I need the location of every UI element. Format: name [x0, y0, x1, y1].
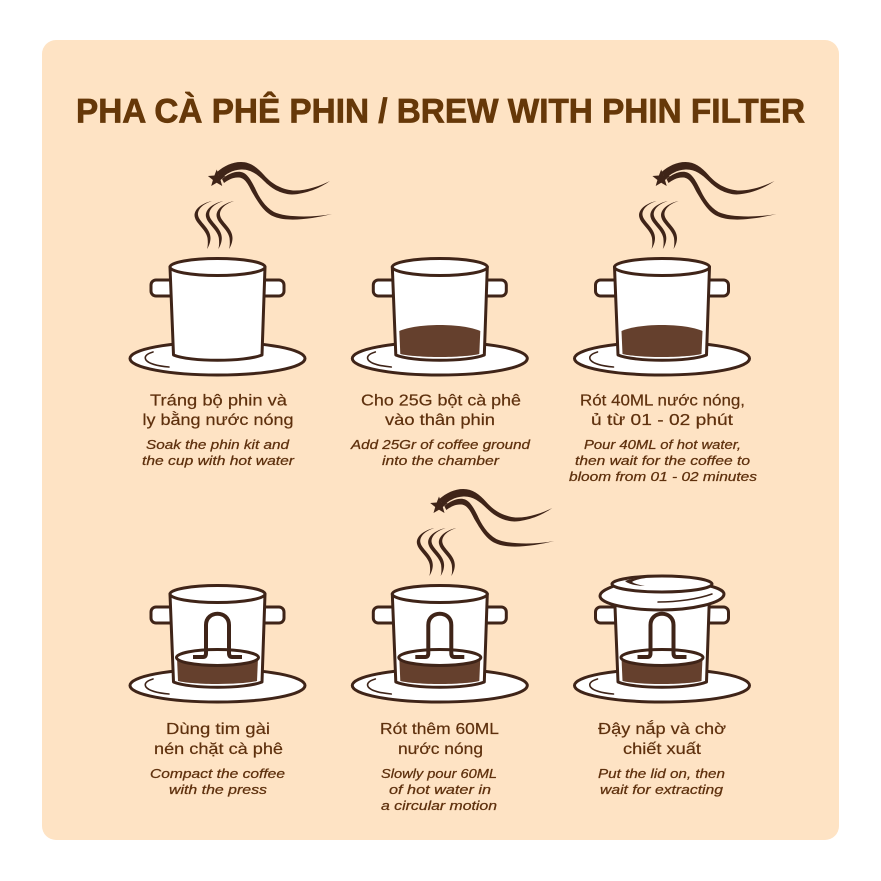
text: step 5 caption: Slowly pour 60ML: [381, 766, 497, 781]
text: step 6 caption: [598, 719, 727, 797]
icon: phin with coffee ground: [352, 258, 527, 375]
text: step 5 caption: Rót thêm 60ML: [380, 721, 499, 738]
text: step 2 caption: Add 25Gr of coffee ground: [350, 437, 531, 452]
text: step 3 caption: ủ từ 01 - 02 phút: [591, 412, 734, 429]
text: step 3 caption: [569, 392, 758, 484]
text: step 2 caption: [350, 392, 531, 468]
text: step 5 caption: [380, 721, 499, 813]
text: step 4 caption: with the press: [169, 782, 268, 797]
icon: empty phin with steam: [130, 162, 332, 375]
icon: phin with press: [130, 586, 305, 702]
text: step 3 caption: Rót 40ML nước nóng,: [580, 392, 745, 410]
text: step 5 caption: of hot water in: [389, 782, 491, 797]
panel: step 6: [574, 576, 750, 797]
title: PHA CÀ PHÊ PHIN / BREW WITH PHIN FILTER: [76, 92, 805, 130]
text: step 5 caption: nước nóng: [398, 741, 483, 758]
panel: step 4: [130, 586, 305, 797]
text: step 4 caption: [150, 721, 285, 797]
text: step 4 caption: Compact the coffee: [150, 766, 285, 781]
icon: phin with press and steam: [352, 489, 554, 702]
text: step 2 caption: Cho 25G bột cà phê: [361, 392, 521, 410]
text: step 3 caption: then wait for the coffee to: [575, 453, 750, 468]
text: step 6 caption: chiết xuất: [623, 741, 702, 758]
text: step 3 caption: Pour 40ML of hot water,: [584, 437, 741, 452]
text: step 1 caption: ly bằng nước nóng: [142, 410, 294, 429]
panel: step 5: [352, 489, 554, 813]
text: step 6 caption: Put the lid on, then: [598, 766, 725, 781]
panel: step 1: [130, 162, 332, 468]
text: step 5 caption: a circular motion: [381, 798, 497, 813]
text: step 1 caption: Tráng bộ phin và: [150, 392, 287, 410]
text: step 1 caption: Soak the phin kit and: [146, 437, 290, 452]
text: step 4 caption: nén chặt cà phê: [154, 741, 283, 758]
panel: step 3: [569, 162, 776, 484]
text: step 6 caption: wait for extracting: [600, 782, 724, 797]
icon: phin with lid: [574, 576, 750, 702]
text: step 6 caption: Đậy nắp và chờ: [598, 719, 727, 738]
text: step 1 caption: the cup with hot water: [142, 453, 295, 468]
icon: phin with coffee and steam: [574, 162, 776, 375]
text: step 4 caption: Dùng tim gài: [166, 721, 270, 738]
text: step 1 caption: [142, 392, 295, 468]
panel: step 2: [350, 258, 531, 468]
text: step 2 caption: vào thân phin: [385, 412, 495, 429]
text: step 3 caption: bloom from 01 - 02 minutes: [569, 469, 758, 484]
text: step 2 caption: into the chamber: [382, 453, 500, 468]
